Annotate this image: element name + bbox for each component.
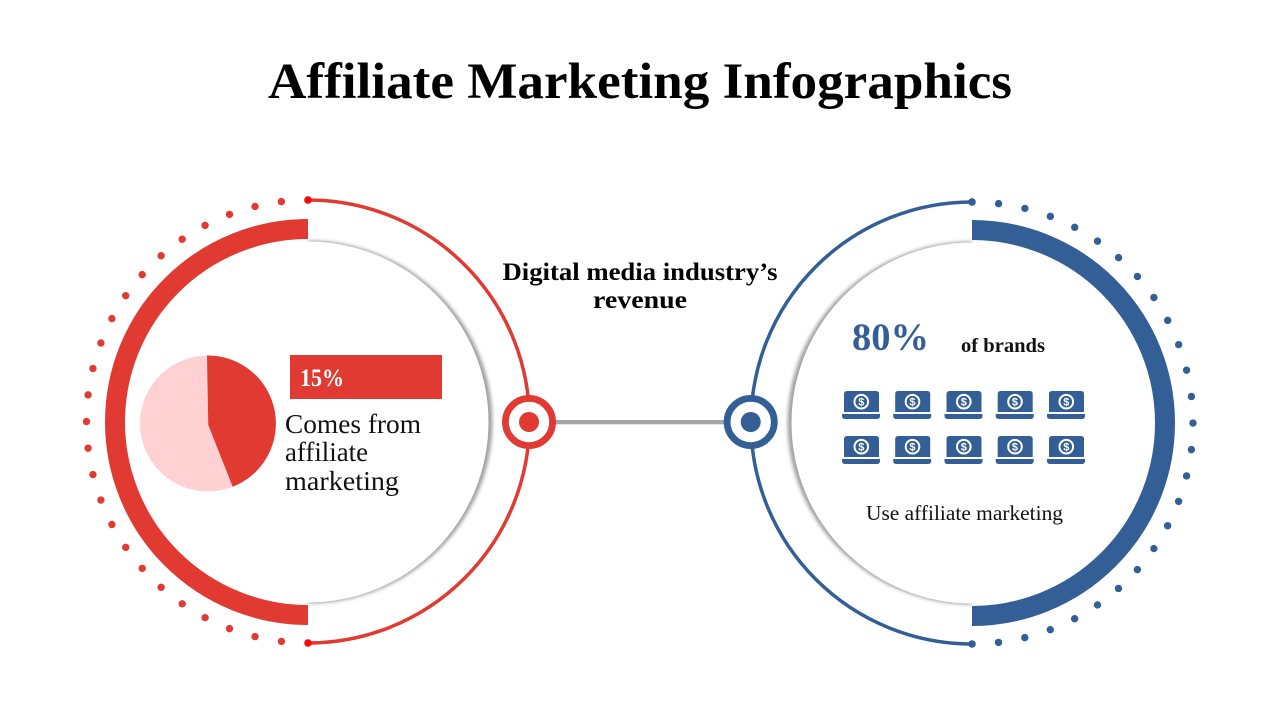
icon: laptop 2 <box>893 391 931 419</box>
red node <box>505 398 553 446</box>
icon: laptop 8 <box>944 436 982 464</box>
left dotted arc <box>87 200 308 643</box>
title: Affiliate Marketing Infographics <box>268 54 1012 110</box>
icon: laptop 6: $ <box>858 442 864 454</box>
of brands label: of brands <box>961 335 1045 357</box>
icon: laptop 3: $ <box>961 397 967 409</box>
80% figure: 80% <box>852 316 929 359</box>
left description: marketing <box>285 466 399 496</box>
left description <box>285 409 421 496</box>
pie chart <box>140 355 276 492</box>
blue node <box>727 398 774 446</box>
left inner white circle <box>128 242 488 602</box>
icon: laptop 9 <box>996 436 1034 464</box>
left description: affiliate <box>285 437 368 467</box>
left thin arc <box>308 200 530 643</box>
panel: left circle <box>87 196 530 647</box>
connector line <box>553 420 727 424</box>
left arc end dots <box>304 196 312 647</box>
icon: laptop 1 <box>842 391 880 419</box>
icon: laptop 8: $ <box>961 442 967 454</box>
right dotted arc <box>972 202 1193 644</box>
icon: laptop 5: $ <box>1063 397 1069 409</box>
right thin arc <box>751 202 972 644</box>
left circle shadow <box>308 240 493 604</box>
icon: laptop 1: $ <box>858 397 864 409</box>
icon: laptop 3 <box>944 391 982 419</box>
icon: laptop 4 <box>996 391 1034 419</box>
right description: Use affiliate marketing <box>866 501 1063 525</box>
icon: laptop 10 <box>1047 436 1085 464</box>
icon: laptop 4: $ <box>1012 397 1018 409</box>
icon: laptop 2: $ <box>909 397 916 409</box>
right thick arc <box>972 230 1165 616</box>
icon grid: laptops with dollar sign <box>842 391 1085 464</box>
centre heading: revenue <box>593 287 687 314</box>
left thick arc <box>115 229 308 615</box>
icon: laptop 5 <box>1047 391 1085 419</box>
centre heading <box>502 259 778 314</box>
panel: right circle <box>751 198 1193 648</box>
15% badge <box>290 355 442 399</box>
icon: laptop 7: $ <box>909 442 916 454</box>
right circle shadow <box>788 242 972 604</box>
icon: laptop 7 <box>893 436 931 464</box>
icon: laptop 9: $ <box>1012 442 1018 454</box>
icon: laptop 10: $ <box>1063 442 1069 454</box>
icon: laptop 6 <box>842 436 880 464</box>
centre heading: Digital media industry’s <box>502 259 778 286</box>
right inner white circle <box>792 242 1152 604</box>
right arc end dots <box>968 198 976 648</box>
15% badge: 15% <box>300 365 344 392</box>
left description: Comes from <box>285 409 421 439</box>
